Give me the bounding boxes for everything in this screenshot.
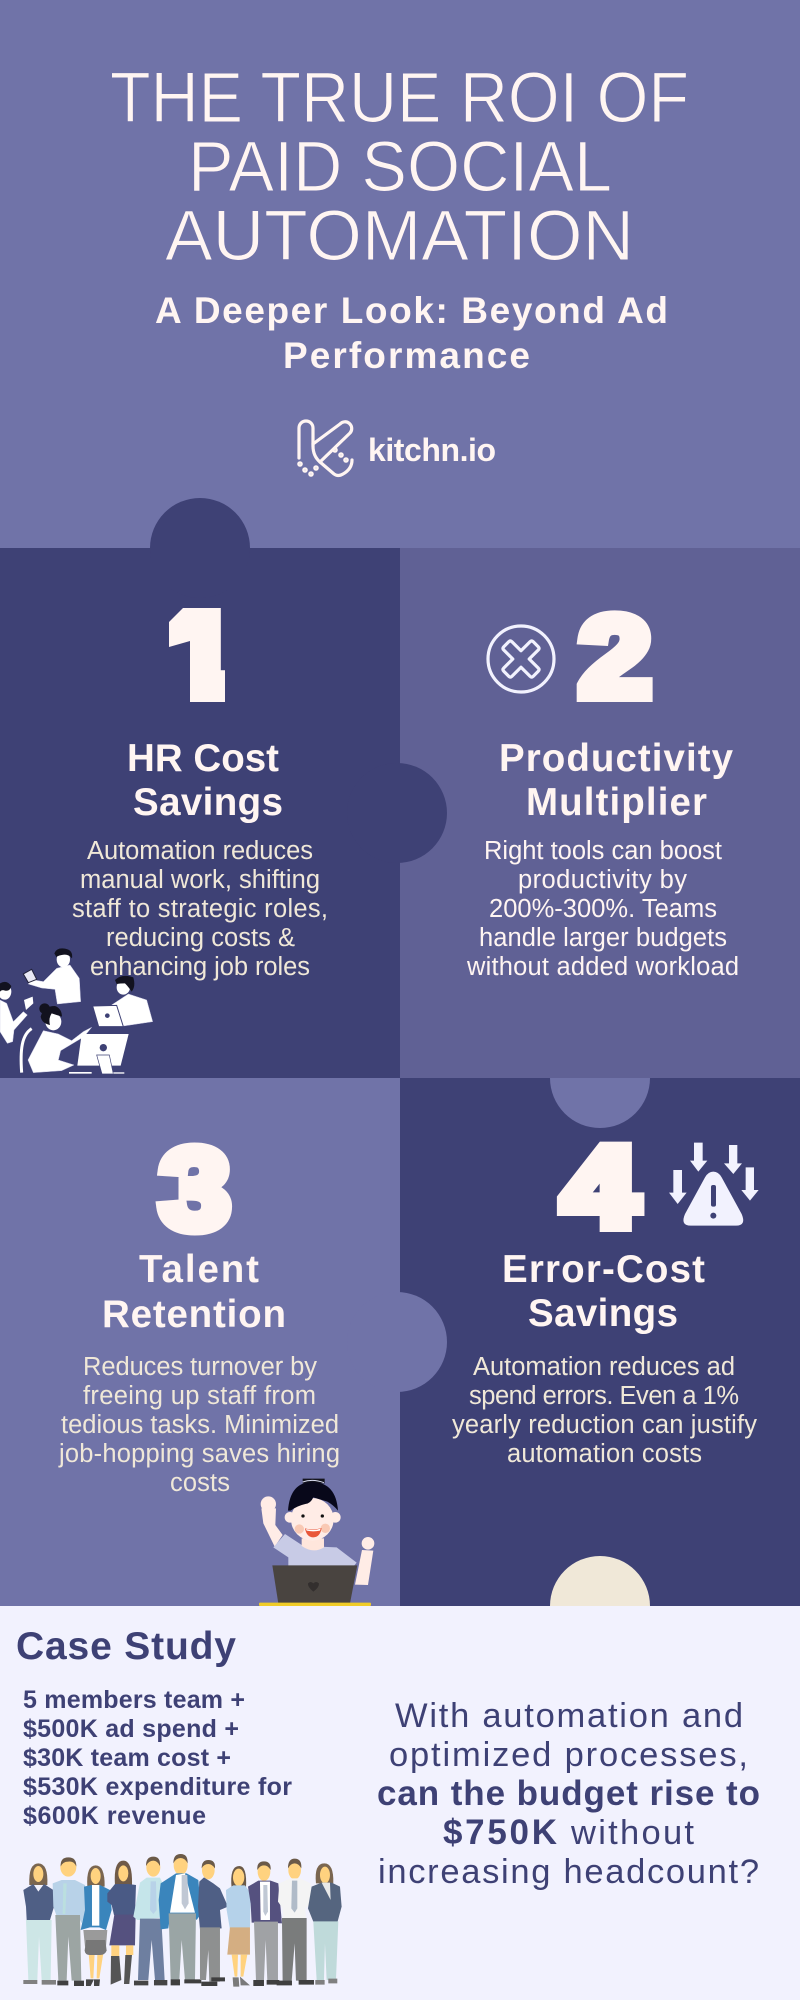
panel: 4 error-cost savings <box>347 1078 800 1606</box>
number 4: 4 <box>562 1124 638 1251</box>
text: question: optimized processes, <box>389 1736 748 1774</box>
subtitle: Performance <box>283 335 530 376</box>
heading: Error-Cost Savings: Error-Cost <box>502 1248 705 1291</box>
text: productivity body: 200%-300%. Teams <box>489 895 717 923</box>
number 2: 2 <box>579 594 651 721</box>
text: error body <box>452 1353 757 1468</box>
text: question: without <box>570 1814 694 1852</box>
text: productivity body <box>466 837 739 981</box>
text: HR body: Automation reduces <box>87 837 313 865</box>
text: HR body: staff to strategic roles, <box>72 895 328 923</box>
person 3 <box>81 1865 112 1986</box>
puzzle knob: top <box>150 498 250 598</box>
heading: Productivity Multiplier: Multiplier <box>526 781 707 824</box>
person 6 <box>159 1854 201 1985</box>
text: case study figures: $500K ad spend + <box>23 1715 239 1743</box>
person 8 <box>226 1866 251 1987</box>
text: productivity body: productivity by <box>518 866 687 894</box>
panel: header <box>0 0 800 549</box>
panel: 1 HR cost savings <box>0 498 400 1078</box>
heading: Talent Retention: Retention <box>102 1293 286 1336</box>
title: PAID SOCIAL <box>188 128 612 207</box>
logo: kitchn.io: kitchn.io <box>368 432 496 468</box>
person 1 <box>23 1863 56 1985</box>
puzzle knob: right of panel 3 <box>347 1292 447 1392</box>
text: error body: yearly reduction can justify <box>452 1411 757 1439</box>
text: HR body <box>72 837 328 981</box>
panel: case study <box>0 1556 800 2000</box>
text: case study figures: $30K team cost + <box>23 1744 231 1772</box>
illustration: office workers <box>0 948 153 1074</box>
person 5 <box>133 1857 167 1985</box>
text: error body: spend errors. Even a 1% <box>469 1382 739 1410</box>
illustration: team of eleven people <box>23 1854 342 1987</box>
panel: 3 talent retention <box>0 1078 400 1606</box>
number 3: 3 <box>160 1126 230 1253</box>
text: error body: automation costs <box>507 1440 702 1468</box>
heading: Talent Retention: Talent <box>139 1248 259 1291</box>
text: case study figures: $600K revenue <box>23 1802 206 1830</box>
heading: Talent Retention <box>102 1248 286 1336</box>
text: talent body: job-hopping saves hiring <box>58 1440 340 1468</box>
logo: kitchn.io <box>299 421 496 476</box>
text: question: increasing headcount? <box>378 1853 759 1891</box>
text: question: can the budget rise to <box>377 1774 760 1813</box>
icon: x in circle <box>488 626 554 692</box>
person 9 <box>248 1861 282 1986</box>
heading: case study: Case Study <box>16 1625 236 1668</box>
person 11 <box>308 1863 342 1985</box>
heading: Error-Cost Savings: Savings <box>528 1292 678 1335</box>
text: productivity body: Right tools can boost <box>484 837 722 865</box>
text: case study figures: 5 members team + <box>23 1686 245 1714</box>
text: talent body: Reduces turnover by <box>83 1353 317 1381</box>
puzzle knob: top <box>550 1078 650 1128</box>
heading: HR Cost Savings: HR Cost <box>127 737 279 780</box>
title <box>110 59 689 276</box>
person 2 <box>53 1857 87 1986</box>
heading: Productivity Multiplier: Productivity <box>499 737 734 780</box>
text: question <box>377 1697 760 1891</box>
number 1: 1 <box>166 587 228 725</box>
person 7 <box>198 1860 228 1986</box>
subtitle: A Deeper Look: Beyond Ad <box>155 290 668 331</box>
heading: Error-Cost Savings <box>502 1248 705 1335</box>
illustration: happy girl with laptop <box>259 1479 374 1606</box>
subtitle <box>155 290 668 376</box>
text: productivity body: without added workload <box>466 953 739 981</box>
text: talent body: freeing up staff from <box>83 1382 316 1410</box>
text: talent body: costs <box>170 1469 230 1497</box>
heading: Productivity Multiplier <box>499 737 734 824</box>
heading: HR Cost Savings <box>127 737 283 824</box>
text: question: With automation and <box>395 1697 743 1735</box>
text: talent body: tedious tasks. Minimized <box>61 1411 339 1439</box>
panel: 2 productivity multiplier <box>347 548 800 1078</box>
puzzle knob: right of panel 1 <box>347 763 447 863</box>
text: productivity body: handle larger budgets <box>479 924 727 952</box>
text: talent body <box>58 1353 340 1497</box>
heading: HR Cost Savings: Savings <box>133 781 283 824</box>
text: HR body: reducing costs & <box>106 924 295 952</box>
text: case study figures <box>23 1686 292 1830</box>
text: case study figures: $530K expenditure for <box>23 1773 292 1801</box>
text: HR body: enhancing job roles <box>90 953 310 981</box>
puzzle knob: cream <box>550 1556 650 1606</box>
icon: kitchn logo mark <box>299 421 352 476</box>
text: HR body: manual work, shifting <box>80 866 320 894</box>
title: THE TRUE ROI OF <box>110 59 689 138</box>
icon: warning with arrows <box>669 1143 759 1226</box>
text: error body: Automation reduces ad <box>473 1353 735 1381</box>
person 4 <box>107 1861 136 1985</box>
title: AUTOMATION <box>165 197 634 276</box>
person 10 <box>277 1859 314 1985</box>
text: question: $750K <box>443 1813 557 1852</box>
